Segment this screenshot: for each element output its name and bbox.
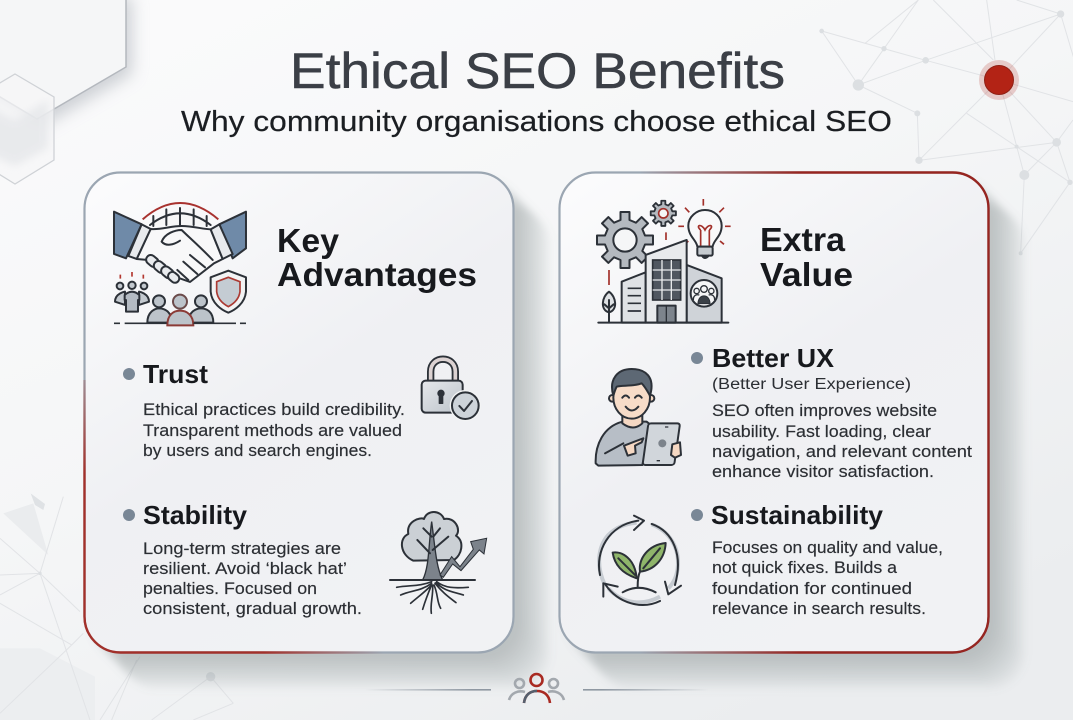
heading: key advantages: Key bbox=[277, 222, 340, 259]
icon: handshake and community bbox=[114, 203, 246, 325]
heading: key advantages: Advantages bbox=[277, 256, 477, 293]
icon: person with tablet bbox=[596, 369, 681, 466]
footer divider right bbox=[583, 689, 709, 691]
text: better ux body: enhance visitor satisfaction. bbox=[712, 463, 934, 481]
text: better ux body: usability. Fast loading, clear bbox=[712, 423, 932, 441]
subtitle: Why community organisations choose ethical SEO bbox=[181, 106, 892, 138]
icon: footer community bbox=[509, 674, 564, 703]
panel: extra value bbox=[560, 172, 988, 652]
heading: trust: Trust bbox=[143, 359, 208, 389]
text: trust body: by users and search engines. bbox=[143, 442, 372, 460]
bullet: trust bbox=[123, 368, 135, 380]
icon: sprout in recycling circle bbox=[599, 516, 681, 605]
text: stability body: Long-term strategies are bbox=[143, 540, 341, 558]
icon: tree with growth arrow bbox=[390, 512, 487, 613]
panel shadows bbox=[90, 178, 1025, 689]
bullet: better ux bbox=[691, 352, 703, 364]
text: sustainability body: Focuses on quality and value, bbox=[712, 539, 943, 557]
text: trust body: Transparent methods are valued bbox=[143, 422, 402, 440]
icon: padlock with check bbox=[422, 359, 481, 421]
title: Ethical SEO Benefits bbox=[290, 43, 785, 99]
text: trust body: Ethical practices build credibility. bbox=[143, 401, 405, 419]
heading: extra value: Value bbox=[760, 256, 853, 293]
heading: sustainability: Sustainability bbox=[711, 500, 884, 530]
text: stability body: consistent, gradual growth. bbox=[143, 600, 362, 618]
bullet: stability bbox=[123, 509, 135, 521]
text: sustainability body: not quick fixes. Builds a bbox=[712, 559, 898, 577]
heading: stability: Stability bbox=[143, 500, 248, 530]
text: stability body: penalties. Focused on bbox=[143, 580, 317, 598]
icon: gears, bulb and building bbox=[597, 199, 731, 323]
text: sustainability body: relevance in search results. bbox=[712, 600, 926, 618]
text: sustainability body: foundation for continued bbox=[712, 580, 912, 598]
footer divider left bbox=[365, 689, 491, 691]
text: better ux body: SEO often improves website bbox=[712, 402, 937, 420]
text: better ux body: navigation, and relevant content bbox=[712, 443, 972, 461]
heading: better ux: Better UX bbox=[712, 343, 835, 373]
decorative network top right bbox=[819, 0, 1073, 255]
text: better ux expansion: (Better User Experience) bbox=[712, 376, 911, 393]
heading: extra value: Extra bbox=[760, 221, 846, 258]
decorative network bottom left bbox=[0, 493, 233, 720]
red network node bbox=[979, 60, 1019, 100]
decorative hexagons top left bbox=[0, 0, 132, 184]
text: stability body: resilient. Avoid ‘black hat’ bbox=[143, 560, 347, 578]
bullet: sustainability bbox=[691, 509, 703, 521]
panel: key advantages bbox=[84, 172, 514, 652]
